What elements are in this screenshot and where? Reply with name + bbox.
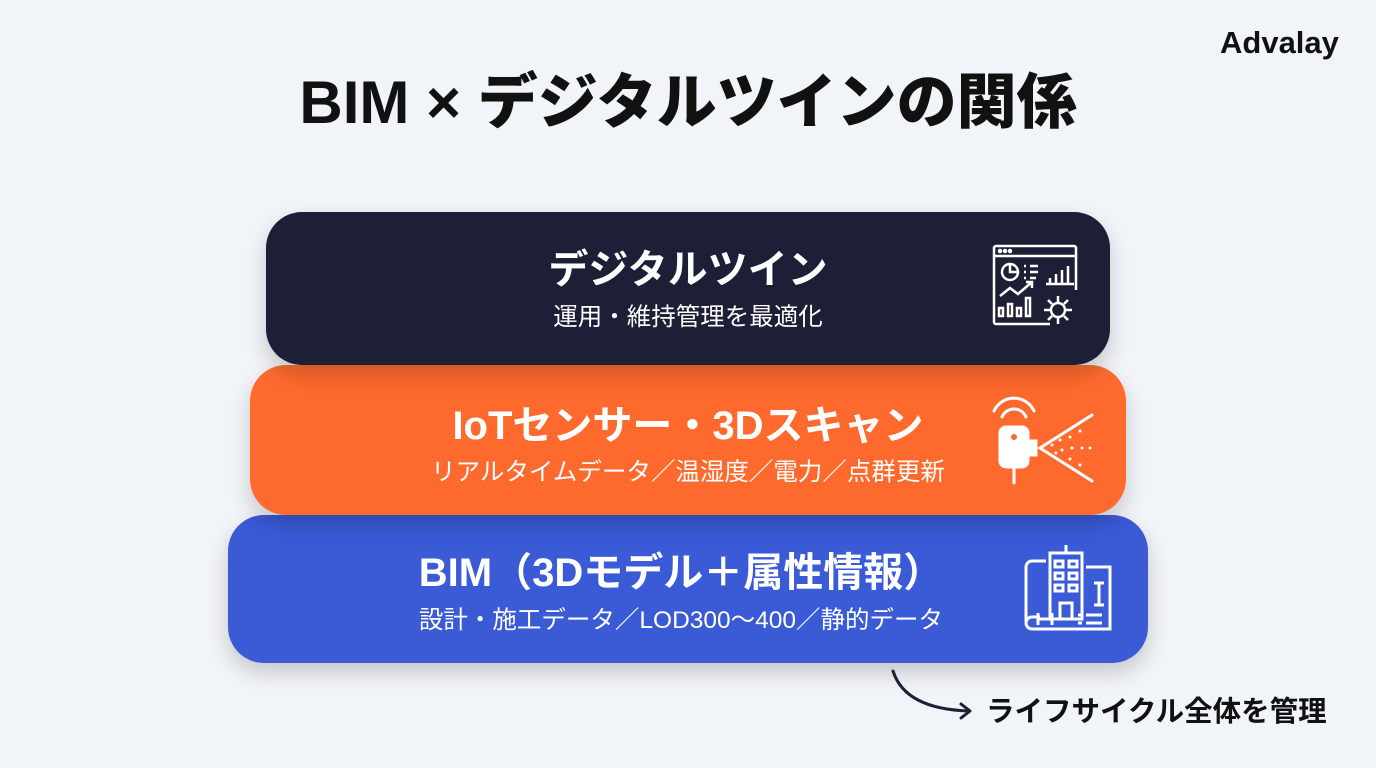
callout: lifecycle: ライフサイクル全体を管理 — [986, 696, 1327, 728]
arrow — [892, 670, 972, 720]
heading: digital twin: デジタルツイン — [548, 248, 828, 292]
panel: BIM — [228, 515, 1148, 663]
panel: IoT — [250, 365, 1126, 515]
subtext: BIM: 設計・施工データ／LOD300〜400／静的データ — [419, 607, 943, 634]
brand logo: Advalay — [1220, 25, 1339, 60]
heading: BIM: BIM（3Dモデル＋属性情報） — [419, 551, 943, 595]
panel: digital twin — [266, 212, 1110, 365]
subtext: IoT: リアルタイムデータ／温湿度／電力／点群更新 — [431, 459, 945, 486]
icon: sensor scanner — [992, 396, 1094, 484]
subtext: digital twin: 運用・維持管理を最適化 — [553, 304, 823, 331]
heading: IoT: IoTセンサー・3Dスキャン — [452, 404, 924, 448]
title: BIM × デジタルツインの関係 — [299, 69, 1077, 136]
icon: dashboard — [992, 244, 1078, 326]
icon: building blueprint — [1024, 545, 1112, 630]
